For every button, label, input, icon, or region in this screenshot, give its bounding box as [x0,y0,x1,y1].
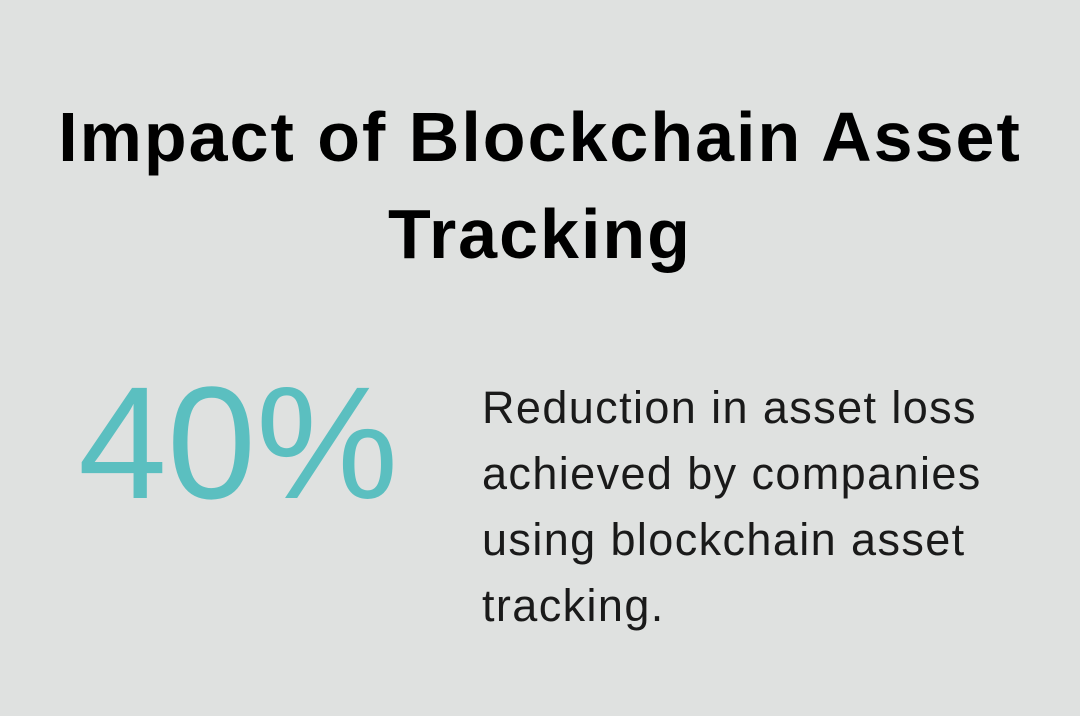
title: Tracking [388,195,692,273]
title [58,98,1022,273]
stat: 40%: 40% [78,353,398,532]
description text: using blockchain asset [482,514,966,565]
title: Impact of Blockchain Asset [58,98,1022,176]
description text [482,382,982,631]
description text: achieved by companies [482,448,982,499]
description text: tracking. [482,580,665,631]
description text: Reduction in asset loss [482,382,977,433]
